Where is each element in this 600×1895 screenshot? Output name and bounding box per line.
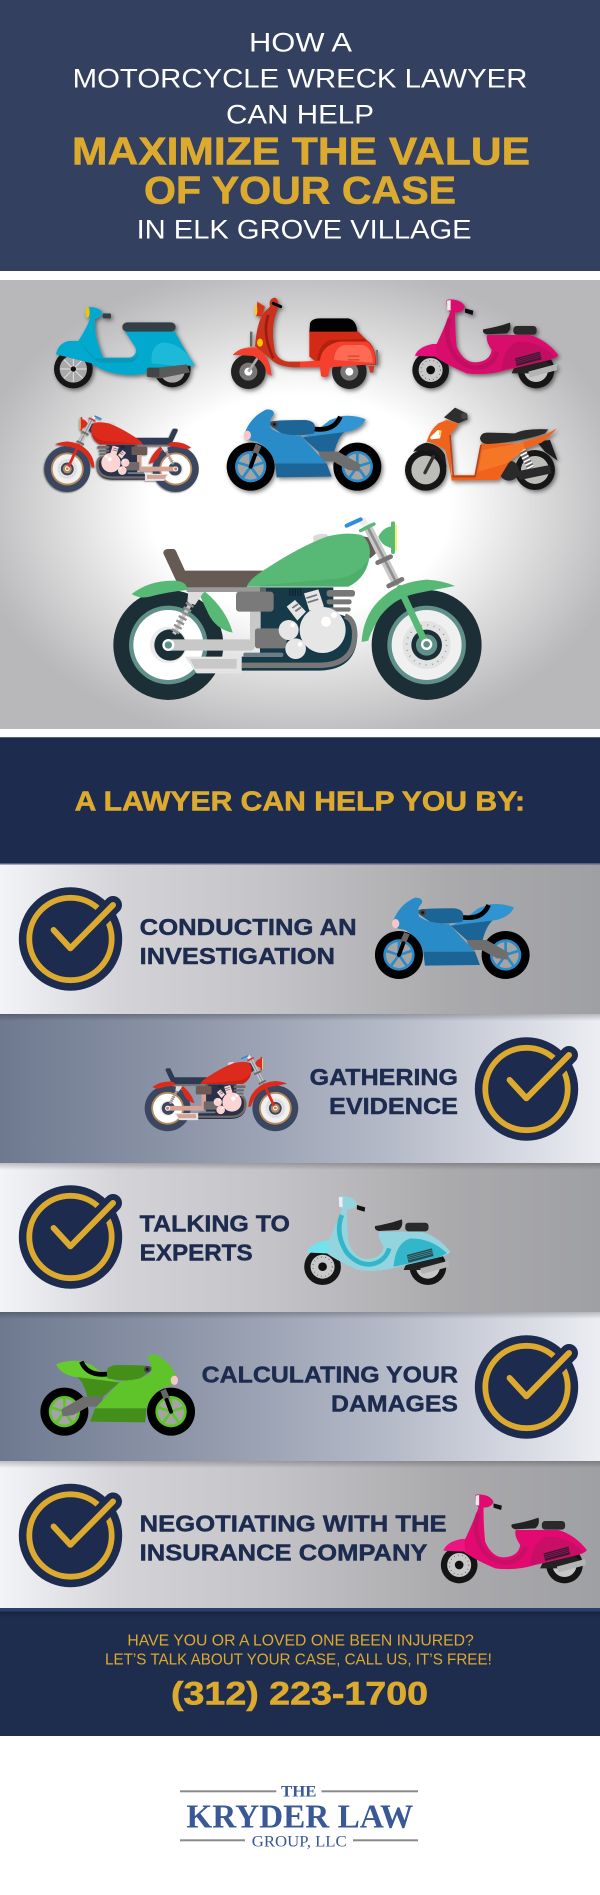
icon: red cafe motorcycle <box>145 1055 298 1131</box>
icon: check mark <box>19 1484 122 1587</box>
heading: a lawyer can help you by: A LAWYER CAN HELP YOU BY: <box>75 786 525 817</box>
icon: blue sport motorcycle <box>227 409 381 491</box>
text: conducting an investigation <box>140 914 357 969</box>
text: talking to experts: EXPERTS <box>140 1240 253 1266</box>
icon: check mark <box>475 1037 578 1141</box>
icon: red scooter <box>231 298 378 389</box>
icon: check mark <box>19 1185 122 1289</box>
title: CAN HELP <box>226 100 374 130</box>
text: talking to experts: TALKING TO <box>140 1211 290 1237</box>
text: gathering evidence: EVIDENCE <box>329 1093 458 1119</box>
phone number: (312) 223-1700 <box>171 1675 428 1711</box>
text: call to action <box>105 1632 492 1668</box>
icon: pink scooter <box>441 1494 587 1583</box>
logo: the kryder law group: THE <box>281 1784 316 1801</box>
title: HOW A <box>249 28 352 58</box>
title: MAXIMIZE THE VALUE <box>72 131 530 174</box>
icon: teal scooter <box>304 1196 450 1285</box>
row 5: negotiating with the insurance company <box>0 1461 600 1608</box>
logo: the kryder law group: GROUP, LLC <box>252 1834 347 1851</box>
header panel <box>0 0 600 271</box>
icon: cyan scooter <box>54 307 195 388</box>
icon: pink scooter <box>412 299 558 388</box>
text: gathering evidence: GATHERING <box>310 1064 458 1090</box>
text: calculating your damages: CALCULATING YOUR <box>202 1362 458 1388</box>
text: negotiating with the insurance company: NEGOTIATING WITH THE <box>140 1511 447 1537</box>
title: MOTORCYCLE WRECK LAWYER <box>73 64 527 94</box>
text: talking to experts <box>140 1211 290 1266</box>
icon: check mark <box>475 1335 578 1439</box>
icon: check mark <box>19 887 122 991</box>
text: conducting an investigation: CONDUCTING AN <box>140 914 357 940</box>
text: negotiating with the insurance company <box>140 1511 447 1566</box>
text: calculating your damages <box>202 1362 458 1417</box>
icon: green sport motorcycle <box>40 1354 195 1436</box>
logo: the kryder law group <box>180 1784 418 1851</box>
text: call to action: LET’S TALK ABOUT YOUR CASE, CALL US, IT’S FREE! <box>105 1651 492 1668</box>
icon: blue sport motorcycle <box>375 898 530 979</box>
title: IN ELK GROVE VILLAGE <box>137 214 472 244</box>
text: gathering evidence <box>310 1064 458 1119</box>
panel: motorcycle collection <box>0 280 600 729</box>
row 4: calculating your damages <box>0 1312 600 1461</box>
text: call to action: HAVE YOU OR A LOVED ONE BEEN INJURED? <box>127 1632 474 1649</box>
icon: large green motorcycle <box>113 517 482 700</box>
row 3: talking to experts <box>0 1163 600 1312</box>
text: conducting an investigation: INVESTIGATION <box>140 943 335 969</box>
text: calculating your damages: DAMAGES <box>331 1391 458 1417</box>
call to action panel <box>0 1608 600 1736</box>
title <box>72 28 530 244</box>
row 2: gathering evidence <box>0 1014 600 1163</box>
section heading panel <box>0 737 600 864</box>
icon: red cafe motorcycle <box>44 415 199 492</box>
text: negotiating with the insurance company: INSURANCE COMPANY <box>140 1540 428 1566</box>
row 1: conducting an investigation <box>0 864 600 1014</box>
logo: the kryder law group: KRYDER LAW <box>186 1798 413 1835</box>
icon: orange scooter <box>405 408 558 491</box>
title: OF YOUR CASE <box>144 170 456 213</box>
